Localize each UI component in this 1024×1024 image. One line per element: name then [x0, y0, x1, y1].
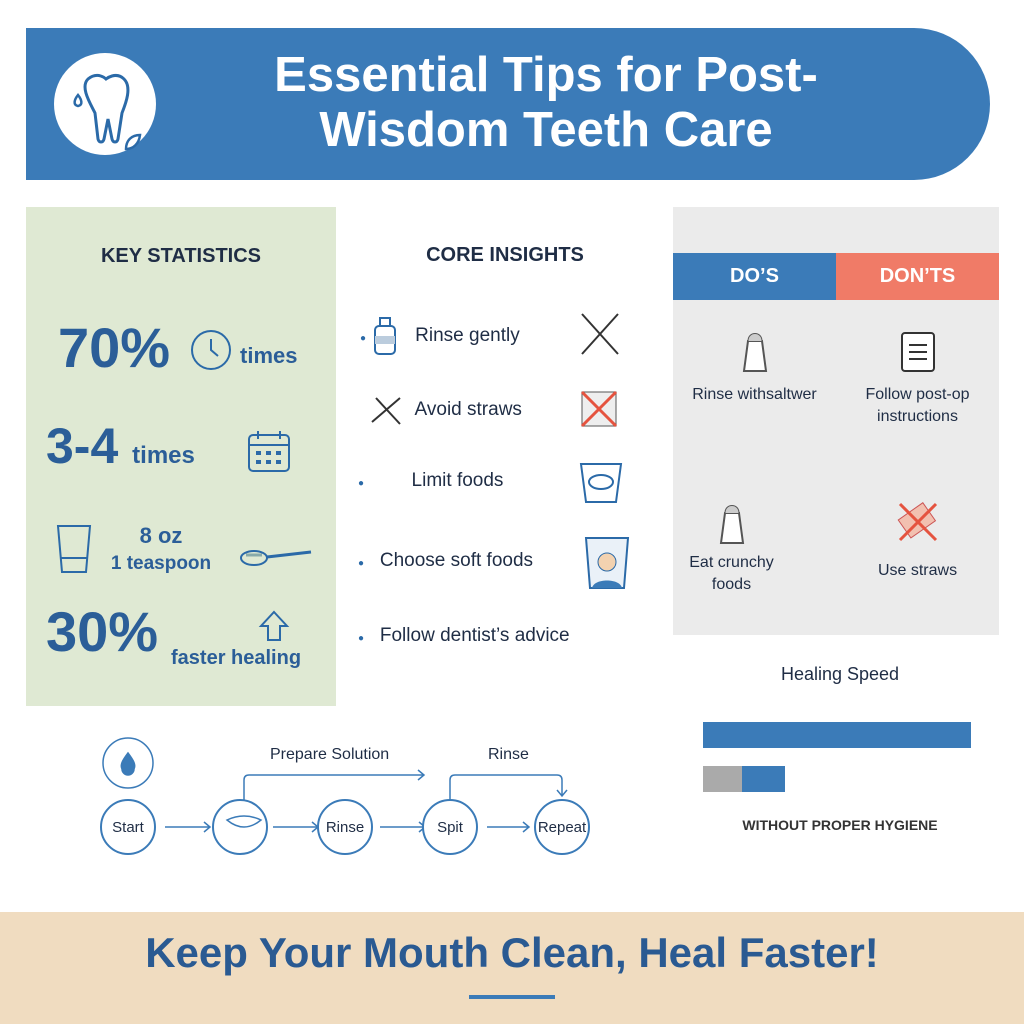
- title: Essential Tips for Post-: [274, 48, 818, 102]
- dont: follow post-op: Follow post-op: [865, 386, 970, 403]
- icon: calendar: [248, 431, 290, 472]
- icon: tooth: [54, 53, 156, 155]
- icon: clock: [191, 330, 231, 370]
- icon: spoon: [240, 550, 312, 566]
- stat 3-4 times: 3-4 times: [46, 418, 195, 474]
- stat 70%: 70%: [58, 316, 170, 379]
- chart: healing speed: [703, 664, 971, 833]
- do: rinse with salt water: [692, 333, 817, 403]
- item: avoid straws: Avoid straws: [415, 399, 522, 420]
- item: rinse gently: ● Rinse gently: [360, 325, 520, 346]
- item: limit foods: ● Limit foods: [358, 470, 503, 491]
- do: rinse with salt water: Rinse withsaltwer: [692, 386, 817, 403]
- item: choose soft foods: ● Choose soft foods: [358, 550, 533, 571]
- header: do's: DO’S: [730, 265, 779, 287]
- footer banner: [0, 912, 1024, 1024]
- do: eat crunchy: Eat crunchy: [689, 554, 774, 571]
- step: repeat: Repeat: [538, 818, 586, 836]
- item: follow dentist's advice: ● Follow dentist’s advice: [358, 625, 570, 646]
- dont: follow post-op: instructions: [877, 408, 958, 425]
- footer tagline: Keep Your Mouth Clean, Heal Faster!: [145, 929, 879, 976]
- header: don'ts: [836, 253, 999, 300]
- heading: KEY STATISTICS: [101, 245, 261, 267]
- step: repeat: [534, 799, 590, 855]
- header banner: [26, 28, 990, 180]
- icon: up arrow: [258, 610, 290, 641]
- chart: healing speed: Healing Speed: [781, 664, 899, 684]
- stat 8 oz: [111, 523, 211, 574]
- heading: CORE INSIGHTS: [426, 244, 584, 266]
- header: do's: [673, 253, 836, 300]
- item: avoid straws: [371, 397, 522, 425]
- do: eat crunchy: [689, 505, 774, 593]
- do: eat crunchy: foods: [712, 576, 751, 593]
- step: start: [100, 799, 156, 855]
- item: rinse gently: [360, 317, 520, 355]
- label: rinse: Rinse: [488, 746, 529, 763]
- panel: core insights: [358, 244, 630, 646]
- step: rinse: Rinse: [326, 818, 364, 836]
- step: spit: [422, 799, 478, 855]
- step: rinse: [317, 799, 373, 855]
- stat 8 oz: 8 oz: [140, 523, 182, 548]
- panel: key statistics: faster healing: [171, 647, 301, 669]
- step: spit: Spit: [437, 818, 463, 836]
- dont: follow post-op: [865, 332, 970, 425]
- title: Wisdom Teeth Care: [319, 103, 773, 157]
- header: don'ts: DON’TS: [880, 265, 955, 287]
- title: [274, 48, 818, 157]
- panel: key statistics: [26, 207, 336, 706]
- stat 8 oz: 1 teaspoon: [111, 553, 211, 574]
- panel: do's and don'ts: [673, 207, 999, 635]
- stat 30%: 30%: [46, 600, 158, 663]
- dont: use straws: Use straws: [878, 562, 957, 579]
- step: lips icon: [212, 799, 268, 855]
- step: start: Start: [112, 818, 144, 836]
- dont: use straws: [878, 502, 957, 579]
- flowchart: rinse process: [100, 737, 590, 855]
- icon: glass: [56, 525, 92, 573]
- label: prepare solution: Prepare Solution: [270, 746, 389, 763]
- chart: healing speed: WITHOUT PROPER HYGIENE: [742, 817, 938, 833]
- panel: key statistics: times: [240, 343, 297, 368]
